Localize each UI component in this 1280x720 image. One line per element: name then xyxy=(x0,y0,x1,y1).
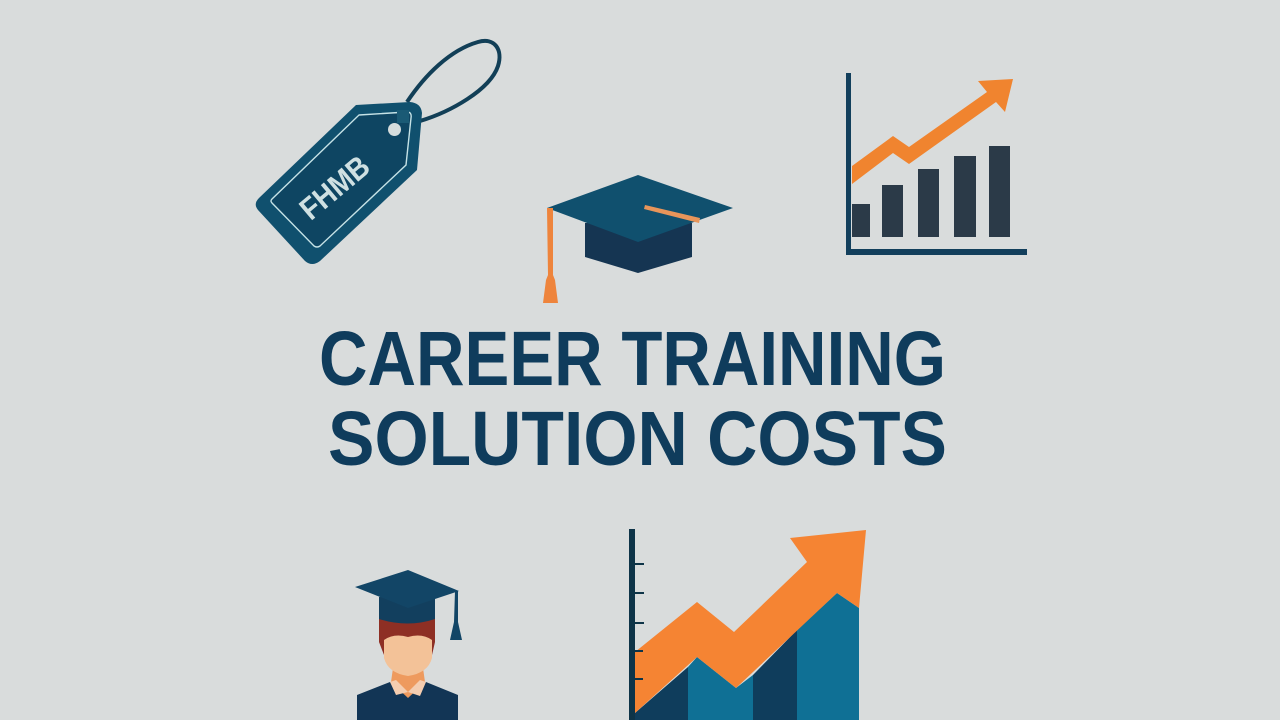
graduate neck and bow xyxy=(391,668,425,698)
cap tassel xyxy=(543,208,558,303)
graduate hair xyxy=(379,615,435,655)
title line 1: CAREER TRAINING xyxy=(319,316,946,402)
title line 2: SOLUTION COSTS xyxy=(328,396,947,482)
tag eyelet shadow xyxy=(397,110,409,123)
chart axis xyxy=(629,529,635,720)
tag loop string xyxy=(407,41,499,121)
tag label: FHMB xyxy=(293,148,377,227)
chart axes xyxy=(846,73,1027,255)
icon: graduation cap xyxy=(543,175,733,303)
cap button and cord xyxy=(644,205,700,223)
chart ticks xyxy=(635,563,644,680)
chart: bars with rising arrow xyxy=(846,73,1027,255)
graduate face xyxy=(384,636,432,676)
chart: area bars with large arrow xyxy=(629,529,866,720)
cap base xyxy=(585,223,692,273)
tag inner outline xyxy=(271,112,411,247)
tag body xyxy=(256,102,422,264)
graduate tassel xyxy=(450,591,462,640)
icon: graduate figure xyxy=(355,570,462,720)
chart large arrow xyxy=(635,530,866,713)
chart teal segments xyxy=(688,593,859,720)
chart rising arrow xyxy=(852,79,1013,184)
graduate cap board xyxy=(355,570,459,608)
graduate gown xyxy=(357,682,458,720)
icon: price tag xyxy=(256,41,499,264)
title xyxy=(319,316,947,482)
cap board xyxy=(547,175,733,242)
graduate collar xyxy=(390,680,426,696)
tag eyelet xyxy=(388,123,401,136)
chart bars xyxy=(852,146,1010,237)
chart dark segments xyxy=(635,630,797,720)
graduate cap band xyxy=(379,597,435,624)
